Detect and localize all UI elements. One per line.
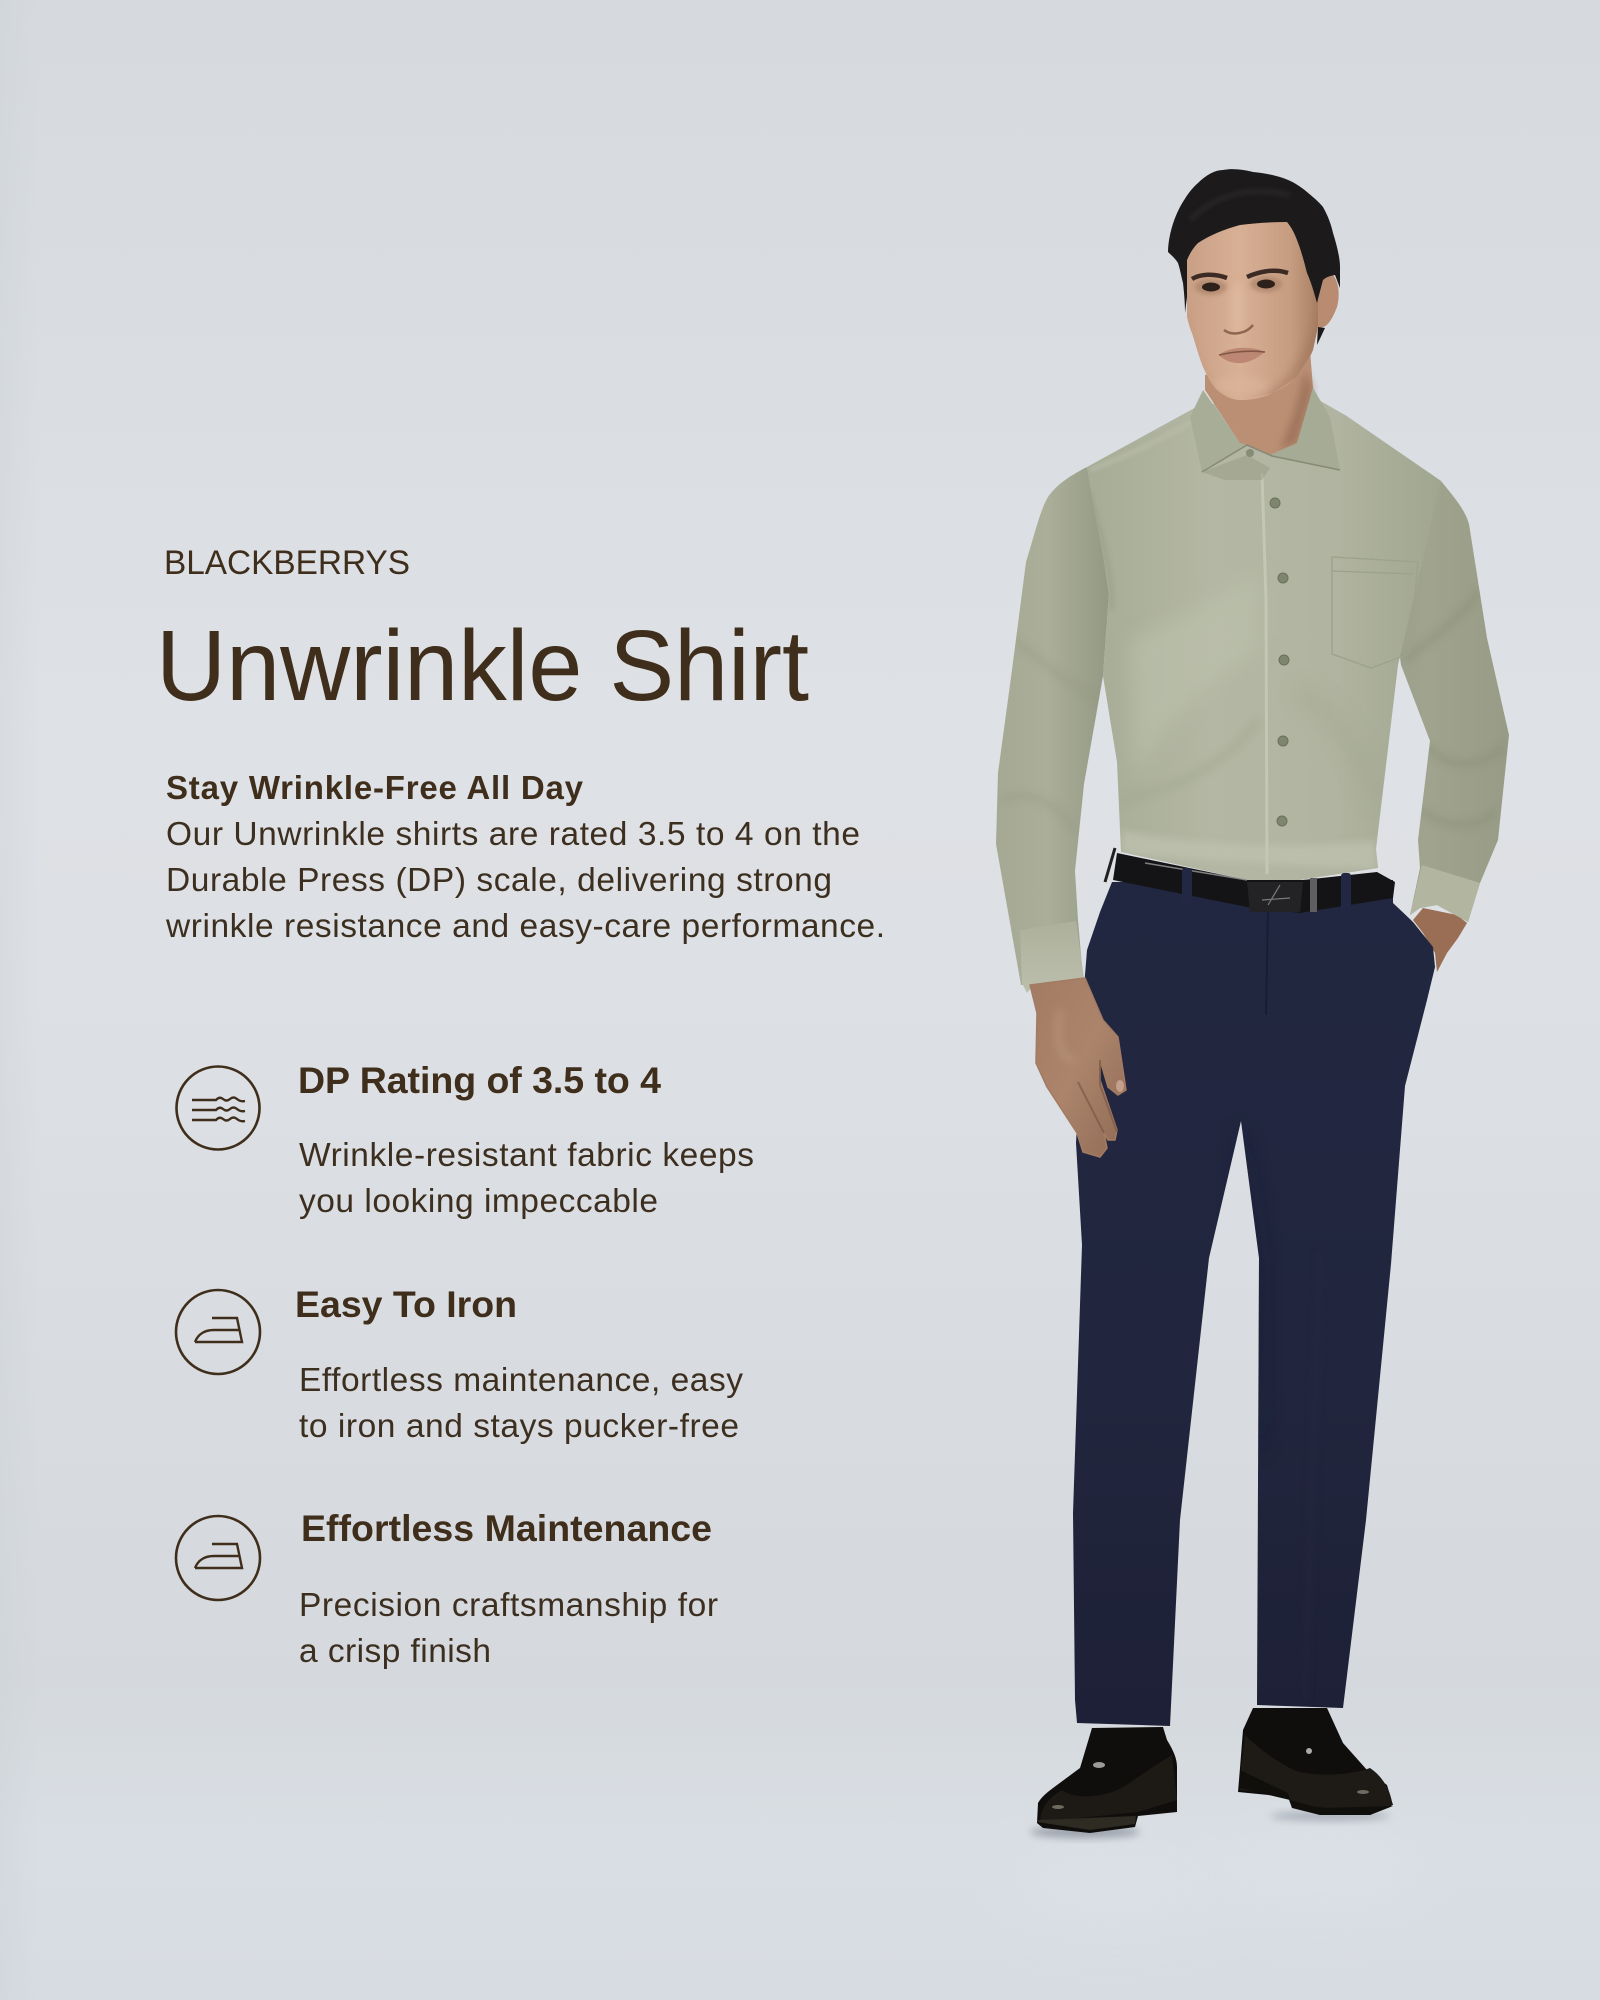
left sleeve folds [1000, 640, 1100, 830]
feature: easy to iron [176, 1283, 743, 1445]
floor shadow and reflection [1000, 1811, 1430, 1925]
intro text block: Stay Wrinkle-Free All Day [166, 769, 584, 806]
intro text block: wrinkle resistance and easy-care performance. [165, 908, 885, 945]
photo: model in sage shirt and navy trousers [996, 169, 1509, 1925]
feature: DP rating [176, 1059, 754, 1220]
description: Precision craftsmanship for [299, 1587, 718, 1624]
face [1187, 210, 1318, 400]
heading: Easy To Iron [295, 1283, 517, 1325]
brand name: BLACKBERRYS [164, 544, 410, 582]
shirt placket [1262, 473, 1267, 874]
right hand [1413, 908, 1467, 972]
description: Wrinkle-resistant fabric keeps [299, 1137, 754, 1174]
lower hair behind ear [1317, 327, 1325, 345]
hair shine [1190, 191, 1290, 220]
shirt left sleeve [996, 467, 1109, 985]
left cuff [1020, 921, 1084, 993]
icon: wavy fabric [176, 1066, 260, 1150]
belt [1105, 848, 1395, 913]
description [299, 1362, 743, 1445]
description: a crisp finish [299, 1633, 491, 1670]
intro text block: Durable Press (DP) scale, delivering strong [166, 862, 832, 899]
left hand [1030, 978, 1126, 1157]
trousers [1073, 880, 1435, 1726]
shirt pocket [1332, 557, 1418, 668]
title: Unwrinkle Shirt [156, 610, 809, 722]
shirt torso [1087, 395, 1441, 880]
hair [1168, 169, 1340, 313]
collar [1190, 388, 1340, 480]
shirt buttons [1270, 498, 1289, 826]
heading: Effortless Maintenance [301, 1507, 712, 1549]
left shoe [1037, 1727, 1177, 1833]
intro text block: Our Unwrinkle shirts are rated 3.5 to 4 on the [166, 816, 860, 853]
description: Effortless maintenance, easy [299, 1362, 743, 1399]
icon: iron [176, 1516, 260, 1600]
face shading [1194, 275, 1318, 394]
description [299, 1137, 754, 1220]
facial features [1192, 271, 1288, 363]
feature: effortless maintenance [176, 1507, 718, 1670]
description [299, 1587, 718, 1670]
heading: DP Rating of 3.5 to 4 [298, 1059, 661, 1101]
right sleeve folds [1429, 748, 1430, 749]
description: you looking impeccable [299, 1183, 658, 1220]
shirt right sleeve [1345, 415, 1509, 922]
icon: iron [176, 1290, 260, 1374]
description: to iron and stays pucker-free [299, 1408, 739, 1445]
neck [1205, 350, 1313, 455]
right shoe [1238, 1708, 1393, 1815]
shirt folds [1088, 420, 1378, 870]
right cuff [1410, 865, 1480, 922]
intro text block [165, 769, 885, 945]
ear [1317, 275, 1339, 328]
